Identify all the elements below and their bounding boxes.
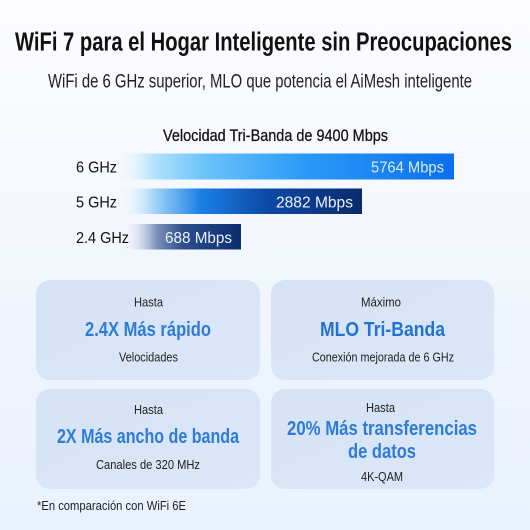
bar row: 6 GHz: 6 GHz: [76, 160, 117, 176]
panel: MLO: Máximo: [361, 294, 401, 310]
panel: data transfer: [271, 389, 494, 489]
panel: bandwidth: 2X Más ancho de banda: [57, 425, 239, 448]
panel: faster: [36, 280, 260, 380]
panel: bandwidth: Hasta: [134, 402, 164, 417]
chart: tri-band speed: [76, 127, 454, 250]
panel: bandwidth: [36, 389, 260, 489]
panel: MLO: MLO Tri-Banda: [320, 318, 446, 341]
bar row: 2.4 GHz: 2.4 GHz: [76, 230, 129, 247]
panel: data transfer: Hasta: [366, 400, 396, 415]
panel: bandwidth: Canales de 320 MHz: [96, 457, 200, 472]
bar row: 2.4 GHz: 688 Mbps: [165, 230, 232, 247]
panel: faster: Velocidades: [119, 350, 178, 364]
bar row: 5 GHz: 2882 Mbps: [276, 194, 353, 212]
bar row: 5 GHz: [76, 188, 362, 214]
panel: data transfer: 20% Más transferencias: [287, 417, 477, 440]
bar row: 5 GHz: 5 GHz: [76, 194, 117, 212]
panel: faster: 2.4X Más rápido: [85, 318, 211, 341]
bar row: 6 GHz: [76, 154, 454, 180]
chart heading: Velocidad Tri-Banda de 9400 Mbps: [163, 127, 388, 145]
panel: faster: Hasta: [134, 294, 164, 310]
panel: data transfer: 4K-QAM: [361, 469, 403, 484]
panel: data transfer: de datos: [348, 440, 416, 463]
bar row: 2.4 GHz: [76, 224, 241, 250]
footnote: *En comparación con WiFi 6E: [37, 498, 186, 513]
panel: MLO: [271, 280, 494, 380]
panel: MLO: Conexión mejorada de 6 GHz: [312, 350, 454, 364]
bar row: 6 GHz: 5764 Mbps: [371, 160, 444, 176]
